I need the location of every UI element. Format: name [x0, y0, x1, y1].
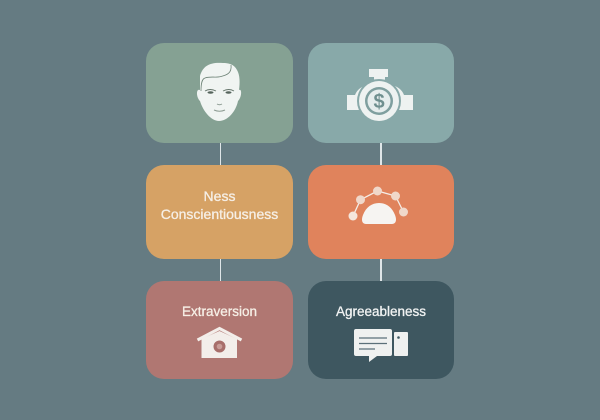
connector: right bottom: [380, 259, 382, 281]
panel: face: [146, 43, 293, 143]
panel: agreeableness: [308, 281, 454, 379]
icon: cloud network: [348, 186, 408, 224]
panel: cloud network: [308, 165, 454, 259]
panel: money valve: [308, 43, 454, 143]
connector: left top: [220, 142, 221, 165]
panel: conscientiousness: [146, 165, 293, 259]
label: extraversion: Extraversion: [182, 304, 257, 319]
icon: face: [197, 62, 242, 121]
label: conscientiousness: Conscientiousness: [161, 206, 278, 222]
label: ness: Ness: [204, 188, 235, 204]
icon: chat and device: [354, 329, 408, 362]
icon: dollar valve: [347, 69, 413, 121]
connector: right top: [380, 142, 382, 165]
panel: extraversion: [146, 281, 293, 379]
label: agreeableness: Agreeableness: [336, 304, 426, 319]
icon: dollar valve: $: [373, 91, 385, 113]
connector: left bottom: [220, 259, 221, 281]
icon: house: [196, 326, 242, 358]
